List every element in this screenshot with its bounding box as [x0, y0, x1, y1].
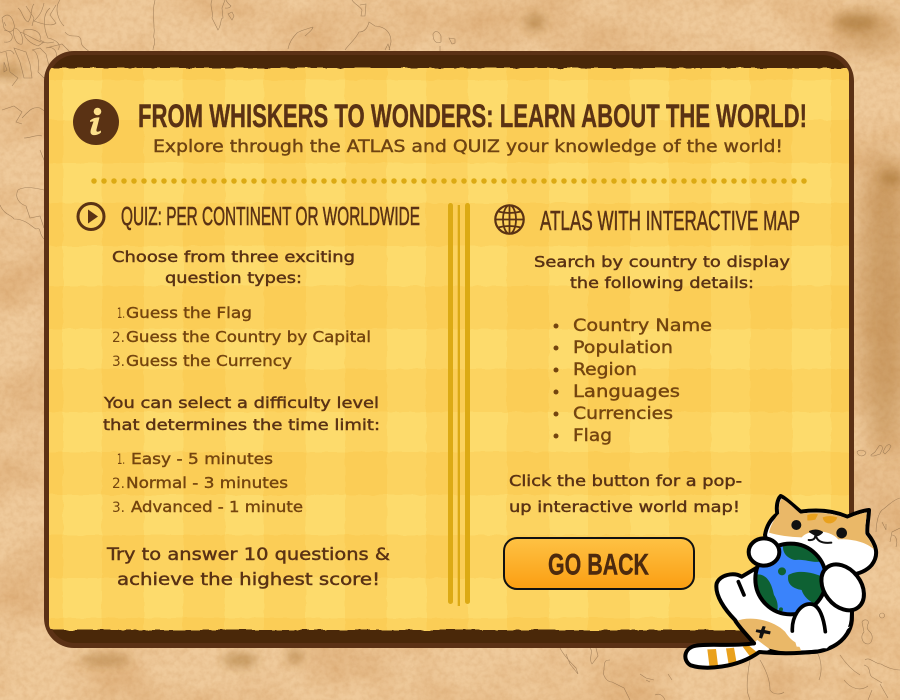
list: atlas details: [554, 316, 712, 445]
text block: difficulty intro: [103, 394, 380, 434]
list: atlas details: Flag: [573, 426, 612, 445]
text block: quiz goal: achieve the highest score!: [117, 570, 380, 590]
eyes: [791, 520, 847, 538]
list: atlas details: Currencies: [573, 404, 673, 423]
text block: difficulty intro: that determines the time limit:: [103, 416, 380, 434]
list: difficulty levels: 3.: [112, 500, 125, 516]
illustration: cat holding globe: [685, 496, 876, 668]
list: difficulty levels: 2.: [112, 476, 125, 492]
text block: question types intro: question types:: [165, 269, 302, 287]
dotted divider: [94, 178, 806, 184]
cat hip patch: [736, 619, 802, 652]
icon: play: [78, 204, 104, 230]
list: difficulty levels: [112, 450, 303, 516]
text block: map instruction: [509, 472, 742, 516]
subtitle: Explore through the ATLAS and QUIZ your knowledge of the world!: [153, 137, 783, 156]
list: difficulty levels: Easy - 5 minutes: [131, 450, 273, 468]
hip mark: [756, 626, 771, 639]
text block: question types intro: Choose from three exciting: [112, 248, 355, 266]
list: difficulty levels: 1.: [117, 452, 125, 468]
text block: difficulty intro: You can select a difficulty level: [103, 394, 379, 412]
text block: quiz goal: Try to answer 10 questions &: [106, 545, 390, 565]
text block: map instruction: up interactive world map!: [509, 498, 740, 516]
list: question types: Guess the Flag: [126, 304, 252, 322]
list: question types: 3.: [112, 354, 125, 370]
list: question types: 1.: [117, 306, 125, 322]
text block: quiz goal: [106, 545, 390, 590]
nose: [810, 530, 822, 535]
column divider: [448, 203, 470, 606]
cat tail: [685, 621, 817, 668]
button: go back: [504, 538, 694, 589]
panel: plaid paper: [40, 68, 860, 630]
list: atlas details: Languages: [573, 382, 680, 401]
list: atlas details: Region: [573, 360, 637, 379]
head stripes: [807, 514, 837, 523]
leg lines: [738, 582, 825, 632]
list: atlas details: Country Name: [573, 316, 712, 335]
left paw: [749, 538, 779, 566]
list: question types: 2.: [112, 330, 125, 346]
panel: card frame: [44, 51, 854, 648]
right paw: [813, 556, 873, 619]
text block: atlas intro: Search by country to display: [534, 253, 790, 271]
list: question types: [112, 304, 371, 370]
list: difficulty levels: Advanced - 1 minute: [131, 498, 303, 516]
text block: question types intro: [112, 248, 355, 287]
list: question types: Guess the Country by Capital: [126, 328, 371, 346]
list: atlas details: Population: [573, 338, 673, 357]
list: difficulty levels: Normal - 3 minutes: [126, 474, 288, 492]
icon: globe: [495, 205, 524, 234]
mouth: [809, 530, 831, 543]
button: go back: GO BACK: [548, 548, 649, 582]
text block: map instruction: Click the button for a pop-: [509, 472, 742, 490]
cat body: [716, 560, 853, 653]
hind leg: [792, 604, 850, 648]
icon: info: [73, 99, 119, 145]
text block: atlas intro: [534, 253, 790, 292]
cat head: [765, 496, 876, 576]
globe: [753, 543, 830, 614]
text block: atlas intro: the following details:: [570, 274, 754, 292]
head patch: [769, 499, 874, 549]
heading: quiz: QUIZ: PER CONTINENT OR WORLDWIDE: [121, 201, 420, 231]
list: question types: Guess the Currency: [126, 352, 292, 370]
panel: dark band shading: [49, 55, 849, 643]
